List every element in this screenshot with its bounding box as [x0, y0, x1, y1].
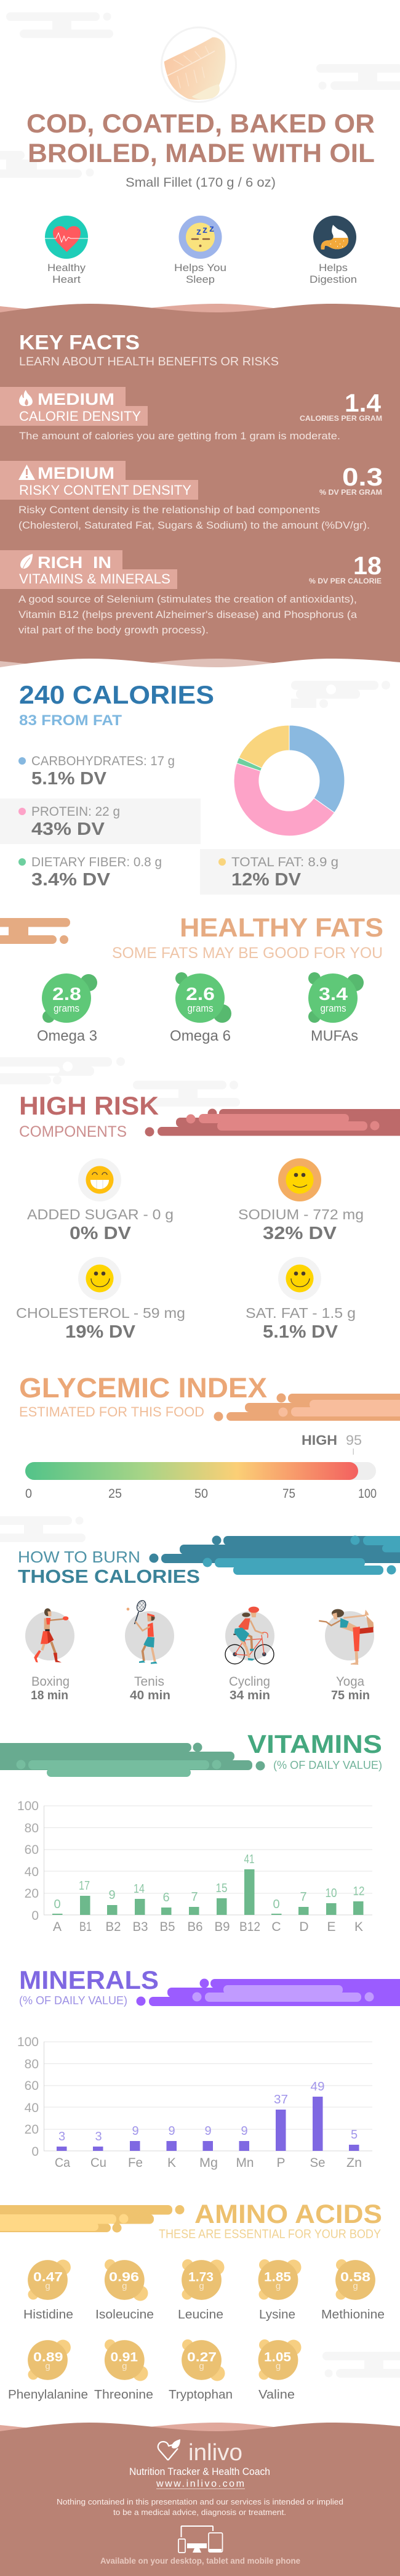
amino acid: tryptophan: 0.27 — [187, 2350, 217, 2365]
fact: rich in vitamins and minerals: VITAMINS & MINERALS — [19, 571, 170, 587]
gauge: glycemic index: 50 — [194, 1487, 208, 1501]
stat: omega 6: grams — [187, 1002, 213, 1014]
benefit: helps you sleep: z — [209, 224, 214, 234]
decorative band: high risk — [145, 1109, 400, 1136]
gauge: glycemic index: 95 — [346, 1432, 362, 1448]
bar chart: vitamins: B9 — [214, 1920, 230, 1934]
amino acid: phenylalanine: Phenylalanine — [8, 2388, 88, 2402]
bar chart: minerals: 9 — [204, 2124, 212, 2138]
decorative band: amino acids — [0, 2205, 185, 2233]
bar chart: vitamins: 7 — [300, 1890, 307, 1904]
bar chart: minerals: 80 — [25, 2057, 39, 2071]
risk: sodium — [238, 1158, 364, 1243]
bar chart: minerals: 60 — [25, 2079, 39, 2093]
title: BROILED, MADE WITH OIL — [28, 139, 375, 168]
fact: rich in vitamins and minerals — [0, 550, 382, 636]
title — [26, 109, 375, 168]
macro: protein: PROTEIN: 22 g — [31, 805, 120, 819]
amino acid: leucine — [178, 2259, 224, 2322]
risk: sodium: 32% DV — [263, 1224, 337, 1243]
title: COD, COATED, BAKED OR — [26, 109, 375, 139]
bar chart: vitamins: 7 — [191, 1890, 198, 1904]
bar chart: vitamins: D — [299, 1920, 309, 1934]
activity: yoga — [319, 1609, 374, 1702]
bar chart: vitamins: 10 — [325, 1887, 337, 1900]
bar chart: minerals: 0 — [31, 2145, 39, 2159]
benefit: helps digestion: Digestion — [310, 274, 357, 285]
decorative band: vitamins — [0, 1742, 265, 1777]
panel: footer — [0, 2423, 400, 2576]
fact: calorie density — [0, 387, 382, 442]
bar chart: minerals: 20 — [25, 2123, 39, 2137]
bar chart: minerals — [17, 2035, 372, 2170]
fact: rich in vitamins and minerals: 18 — [353, 551, 382, 580]
heading: key facts: KEY FACTS — [19, 331, 140, 354]
heading: calories: 240 CALORIES — [19, 680, 214, 709]
bar chart: vitamins: 14 — [134, 1882, 145, 1896]
amino acid: histidine — [23, 2260, 73, 2322]
amino acid: lysine — [258, 2259, 302, 2322]
macro: total fat: TOTAL FAT: 8.9 g — [231, 855, 338, 869]
stat: mufas: 3.4 — [319, 985, 348, 1004]
bar chart: minerals: 9 — [132, 2124, 139, 2138]
amino acid: isoleucine — [95, 2259, 154, 2322]
bar chart: vitamins: E — [327, 1920, 336, 1934]
decorative band: glycemic index — [214, 1394, 400, 1421]
bar chart: vitamins: K — [354, 1920, 363, 1934]
disclaimer — [57, 2497, 343, 2517]
bar chart: vitamins: 17 — [79, 1879, 90, 1893]
bar chart: minerals: Mn — [236, 2156, 254, 2170]
bar chart: minerals: Cu — [90, 2156, 106, 2170]
icon: cyclist — [225, 1607, 274, 1664]
bar chart: vitamins: B3 — [133, 1920, 148, 1934]
activity: boxing: 18 min — [31, 1689, 68, 1702]
amino acid: histidine: 0.47 — [33, 2270, 63, 2285]
benefit: healthy heart: Healthy — [47, 262, 86, 274]
fact: rich in vitamins and minerals: vital part of the body growth process). — [18, 624, 209, 636]
risk: added sugar: 0% DV — [70, 1224, 132, 1243]
decorative band: minerals — [137, 1979, 400, 2006]
fact: calorie density: CALORIE DENSITY — [19, 408, 141, 424]
bar chart: minerals: K — [167, 2156, 176, 2170]
macro: protein — [0, 798, 201, 844]
fact: calorie density: CALORIES PER GRAM — [300, 414, 382, 423]
amino acid: leucine: 1.73 — [188, 2270, 214, 2285]
bar chart: vitamins: 0 — [31, 1909, 39, 1923]
amino acid: phenylalanine: g — [45, 2361, 50, 2371]
bar chart: minerals: Se — [310, 2156, 325, 2170]
bar chart: vitamins: 6 — [162, 1891, 170, 1904]
amino acid: methionine: g — [353, 2281, 358, 2291]
benefit: helps digestion — [310, 216, 357, 285]
fact: risky content density: (Cholesterol, Saturated Fat, Sugars & Sodium) to the amount (%DV/gr). — [18, 519, 370, 531]
risk: saturated fat — [246, 1257, 356, 1342]
benefit: helps you sleep: Sleep — [186, 274, 215, 285]
activity: tennis — [125, 1599, 174, 1702]
benefit: healthy heart — [45, 216, 88, 285]
bar chart: minerals: Ca — [55, 2156, 70, 2170]
amino acid: lysine: g — [276, 2281, 281, 2291]
activity: yoga: 75 min — [331, 1689, 370, 1702]
heading: minerals: MINERALS — [19, 1965, 159, 1994]
amino acid: valine — [258, 2339, 302, 2402]
fact: risky content density — [0, 461, 383, 531]
amino acid: threonine: g — [122, 2361, 127, 2371]
macro: dietary fiber: DIETARY FIBER: 0.8 g — [31, 855, 162, 869]
activity: tennis: 40 min — [130, 1689, 170, 1702]
amino acid: methionine — [321, 2259, 385, 2322]
tagline: Nutrition Tracker & Health Coach — [129, 2466, 270, 2477]
activity: yoga: Yoga — [336, 1675, 364, 1689]
bar chart: vitamins: 9 — [108, 1888, 116, 1902]
amino acid: lysine: Lysine — [259, 2308, 295, 2322]
amino acid: valine: Valine — [258, 2388, 295, 2402]
benefit: helps you sleep: Helps You — [174, 262, 226, 274]
amino acid: tryptophan: Tryptophan — [169, 2388, 233, 2402]
bar chart: minerals: Fe — [128, 2156, 143, 2170]
icon: flame — [19, 390, 33, 406]
bar chart: minerals: 5 — [351, 2128, 358, 2142]
heading: glycemic index: GLYCEMIC INDEX — [19, 1372, 267, 1404]
subheading: vitamins: (% OF DAILY VALUE) — [273, 1759, 382, 1771]
bar chart: minerals: Mg — [199, 2156, 218, 2170]
bar chart: vitamins: 20 — [25, 1887, 39, 1901]
icon: tennis player — [127, 1599, 158, 1664]
benefit: helps you sleep: z — [196, 227, 201, 237]
subheading: key facts: LEARN ABOUT HEALTH BENEFITS OR RISKS — [19, 356, 279, 368]
activity: boxing — [25, 1608, 74, 1702]
fact: risky content density: RISKY CONTENT DENSITY — [19, 482, 191, 498]
amino acid: valine: g — [276, 2361, 281, 2371]
stat: omega 6: Omega 6 — [170, 1028, 231, 1044]
macro: dietary fiber: 3.4% DV — [31, 870, 111, 890]
activity: cycling: 34 min — [230, 1689, 270, 1702]
activity: cycling: Cycling — [229, 1675, 270, 1689]
bar chart: minerals: Zn — [346, 2156, 362, 2170]
bar chart: minerals: 9 — [241, 2124, 248, 2138]
icon: warning — [18, 465, 35, 480]
bar chart: vitamins: B1 — [79, 1920, 92, 1934]
amino acid: tryptophan — [169, 2339, 233, 2402]
fact: rich in vitamins and minerals: Vitamin B12 (helps prevent Alzheimer's disease) and Phosphorus (a — [18, 609, 358, 620]
bar chart: vitamins: 60 — [25, 1843, 39, 1857]
decorative band: burn calories — [149, 1535, 400, 1575]
stat: mufas: MUFAs — [311, 1028, 358, 1044]
subheading: amino acids: THESE ARE ESSENTIAL FOR YOUR BODY — [159, 2228, 381, 2241]
availability note: Available on your desktop, tablet and mobile phone — [100, 2556, 300, 2566]
subtitle: serving size: Small Fillet (170 g / 6 oz) — [126, 176, 276, 190]
panel: key facts — [0, 304, 400, 678]
macro: total fat — [200, 849, 400, 895]
bar chart: vitamins: 40 — [25, 1865, 39, 1879]
subheading: calories from fat: 83 FROM FAT — [19, 712, 122, 729]
amino acid: methionine: Methionine — [321, 2308, 385, 2322]
risk: cholesterol: CHOLESTEROL - 59 mg — [16, 1305, 185, 1321]
activity: boxing: Boxing — [31, 1675, 70, 1689]
fact: rich in vitamins and minerals: RICH IN — [38, 553, 111, 572]
bar chart: minerals: 9 — [168, 2124, 175, 2138]
amino acid: phenylalanine: 0.89 — [33, 2350, 63, 2365]
gauge: glycemic index: 75 — [282, 1487, 295, 1501]
stat: mufas: grams — [320, 1002, 346, 1014]
amino acid: leucine: Leucine — [178, 2308, 223, 2322]
bar chart: vitamins: C — [271, 1920, 281, 1934]
fact: calorie density: MEDIUM — [38, 390, 114, 408]
heading: high risk: HIGH RISK — [19, 1091, 159, 1120]
heading: how to burn: HOW TO BURN — [18, 1548, 140, 1566]
bar chart: minerals: 49 — [310, 2080, 325, 2094]
amino acid: histidine: g — [45, 2281, 50, 2291]
disclaimer: Nothing contained in this presentation and our services is intended or implied — [57, 2497, 343, 2506]
donut chart: calorie sources — [234, 725, 345, 836]
bar chart: minerals: 100 — [17, 2035, 39, 2049]
gauge: glycemic index: 0 — [25, 1487, 32, 1501]
bar chart: vitamins — [17, 1799, 372, 1934]
risk: added sugar: ADDED SUGAR - 0 g — [27, 1206, 174, 1222]
risk: added sugar — [27, 1158, 174, 1243]
food photo: cod fillet — [161, 27, 236, 102]
bar chart: vitamins: 15 — [215, 1882, 228, 1895]
amino acid: isoleucine: g — [122, 2281, 127, 2291]
risk: cholesterol: 19% DV — [65, 1322, 136, 1342]
bar chart: vitamins: 0 — [273, 1898, 280, 1911]
macro: total fat: 12% DV — [231, 870, 302, 890]
bar chart: vitamins: 12 — [353, 1885, 364, 1898]
heading: amino acids: AMINO ACIDS — [194, 2200, 382, 2229]
macro: carbohydrates: CARBOHYDRATES: 17 g — [31, 754, 175, 768]
decorative band: healthy fats — [0, 918, 70, 944]
risk: sodium: SODIUM - 772 mg — [238, 1206, 364, 1222]
macro: carbohydrates — [18, 754, 175, 789]
activity: tennis: Tenis — [134, 1675, 164, 1689]
heading: those calories: THOSE CALORIES — [18, 1566, 200, 1587]
icon: yoga pose — [319, 1609, 374, 1665]
website link: www.inlivo.com — [156, 2479, 244, 2489]
stat: omega 6: 2.6 — [186, 985, 215, 1004]
subheading: components: COMPONENTS — [19, 1123, 127, 1140]
activity: cycling — [225, 1607, 274, 1702]
icon: boxer — [34, 1608, 68, 1662]
macro: carbohydrates: 5.1% DV — [31, 769, 107, 789]
stat: omega 3: Omega 3 — [37, 1028, 97, 1044]
bar chart: vitamins: 100 — [17, 1799, 39, 1813]
stat: omega 3: 2.8 — [52, 985, 81, 1004]
fact: rich in vitamins and minerals: A good source of Selenium (stimulates the creation of antioxidants), — [18, 593, 357, 605]
bar chart: minerals: 37 — [274, 2093, 288, 2107]
gauge: glycemic index: 25 — [108, 1487, 122, 1501]
bar chart: minerals: 40 — [25, 2101, 39, 2115]
bar chart: minerals: 3 — [58, 2130, 65, 2143]
logo: inlivo: inlivo — [188, 2440, 242, 2466]
bar chart: vitamins: B2 — [106, 1920, 121, 1934]
amino acid: phenylalanine — [8, 2340, 88, 2402]
fact: calorie density: 1.4 — [345, 389, 381, 417]
amino acid: isoleucine: 0.96 — [109, 2270, 139, 2285]
risk: saturated fat: SAT. FAT - 1.5 g — [246, 1305, 356, 1321]
heading: vitamins: VITAMINS — [247, 1729, 382, 1758]
bar chart: minerals: P — [276, 2156, 286, 2170]
risk: saturated fat: 5.1% DV — [263, 1322, 338, 1342]
amino acid: methionine: 0.58 — [340, 2270, 370, 2285]
stat: omega 6 — [170, 972, 231, 1044]
amino acid: isoleucine: Isoleucine — [95, 2308, 154, 2322]
bar chart: vitamins: A — [53, 1920, 62, 1934]
macro: protein: 43% DV — [31, 819, 105, 839]
amino acid: histidine: Histidine — [23, 2308, 73, 2322]
subheading: healthy fats: SOME FATS MAY BE GOOD FOR YOU — [112, 945, 383, 962]
bar chart: minerals: 3 — [95, 2130, 102, 2143]
bar chart: vitamins: B12 — [239, 1920, 260, 1934]
heading: healthy fats: HEALTHY FATS — [180, 913, 383, 943]
benefit: healthy heart: Heart — [52, 274, 81, 285]
amino acid: threonine — [94, 2339, 153, 2402]
disclaimer: to be a medical advice, diagnosis or treatment. — [113, 2508, 286, 2517]
stat: omega 3 — [37, 973, 97, 1044]
bar chart: vitamins: 41 — [244, 1853, 255, 1866]
fact: calorie density: The amount of calories you are getting from 1 gram is moderate. — [19, 430, 340, 442]
amino acid: threonine: Threonine — [94, 2388, 153, 2402]
risk: cholesterol — [16, 1257, 185, 1342]
icon: leaf — [20, 554, 33, 569]
logo: inlivo — [158, 2439, 242, 2466]
bar chart: vitamins: B6 — [187, 1920, 203, 1934]
icon: devices — [178, 2526, 223, 2553]
stat: omega 3: grams — [54, 1002, 79, 1014]
benefit: helps you sleep — [174, 216, 226, 285]
gauge: glycemic index: HIGH — [302, 1432, 337, 1448]
fact: risky content density: 0.3 — [342, 463, 383, 491]
gauge: glycemic index — [25, 1432, 377, 1501]
fact: risky content density: % DV PER GRAM — [319, 488, 382, 497]
stat: mufas — [308, 972, 364, 1044]
gauge: glycemic index: 100 — [358, 1487, 377, 1501]
subheading: minerals: (% OF DAILY VALUE) — [19, 1994, 127, 2007]
bar chart: vitamins: 80 — [25, 1821, 39, 1835]
subheading: glycemic index: ESTIMATED FOR THIS FOOD — [19, 1404, 204, 1420]
bar chart: vitamins: 0 — [54, 1898, 61, 1911]
benefit: helps you sleep: z — [202, 225, 207, 235]
bar chart: vitamins: B5 — [160, 1920, 175, 1934]
amino acid: leucine: g — [199, 2281, 204, 2291]
fact: risky content density: Risky Content density is the relationship of bad components — [18, 504, 320, 516]
amino acid: tryptophan: g — [199, 2361, 204, 2371]
fact: risky content density: MEDIUM — [38, 464, 114, 482]
macro: dietary fiber — [18, 855, 162, 890]
benefit: helps digestion: Helps — [319, 262, 348, 274]
amino acid: lysine: 1.85 — [264, 2270, 291, 2285]
amino acid: threonine: 0.91 — [111, 2350, 138, 2365]
fact: rich in vitamins and minerals: % DV PER CALORIE — [309, 577, 382, 585]
amino acid: valine: 1.05 — [264, 2350, 291, 2365]
